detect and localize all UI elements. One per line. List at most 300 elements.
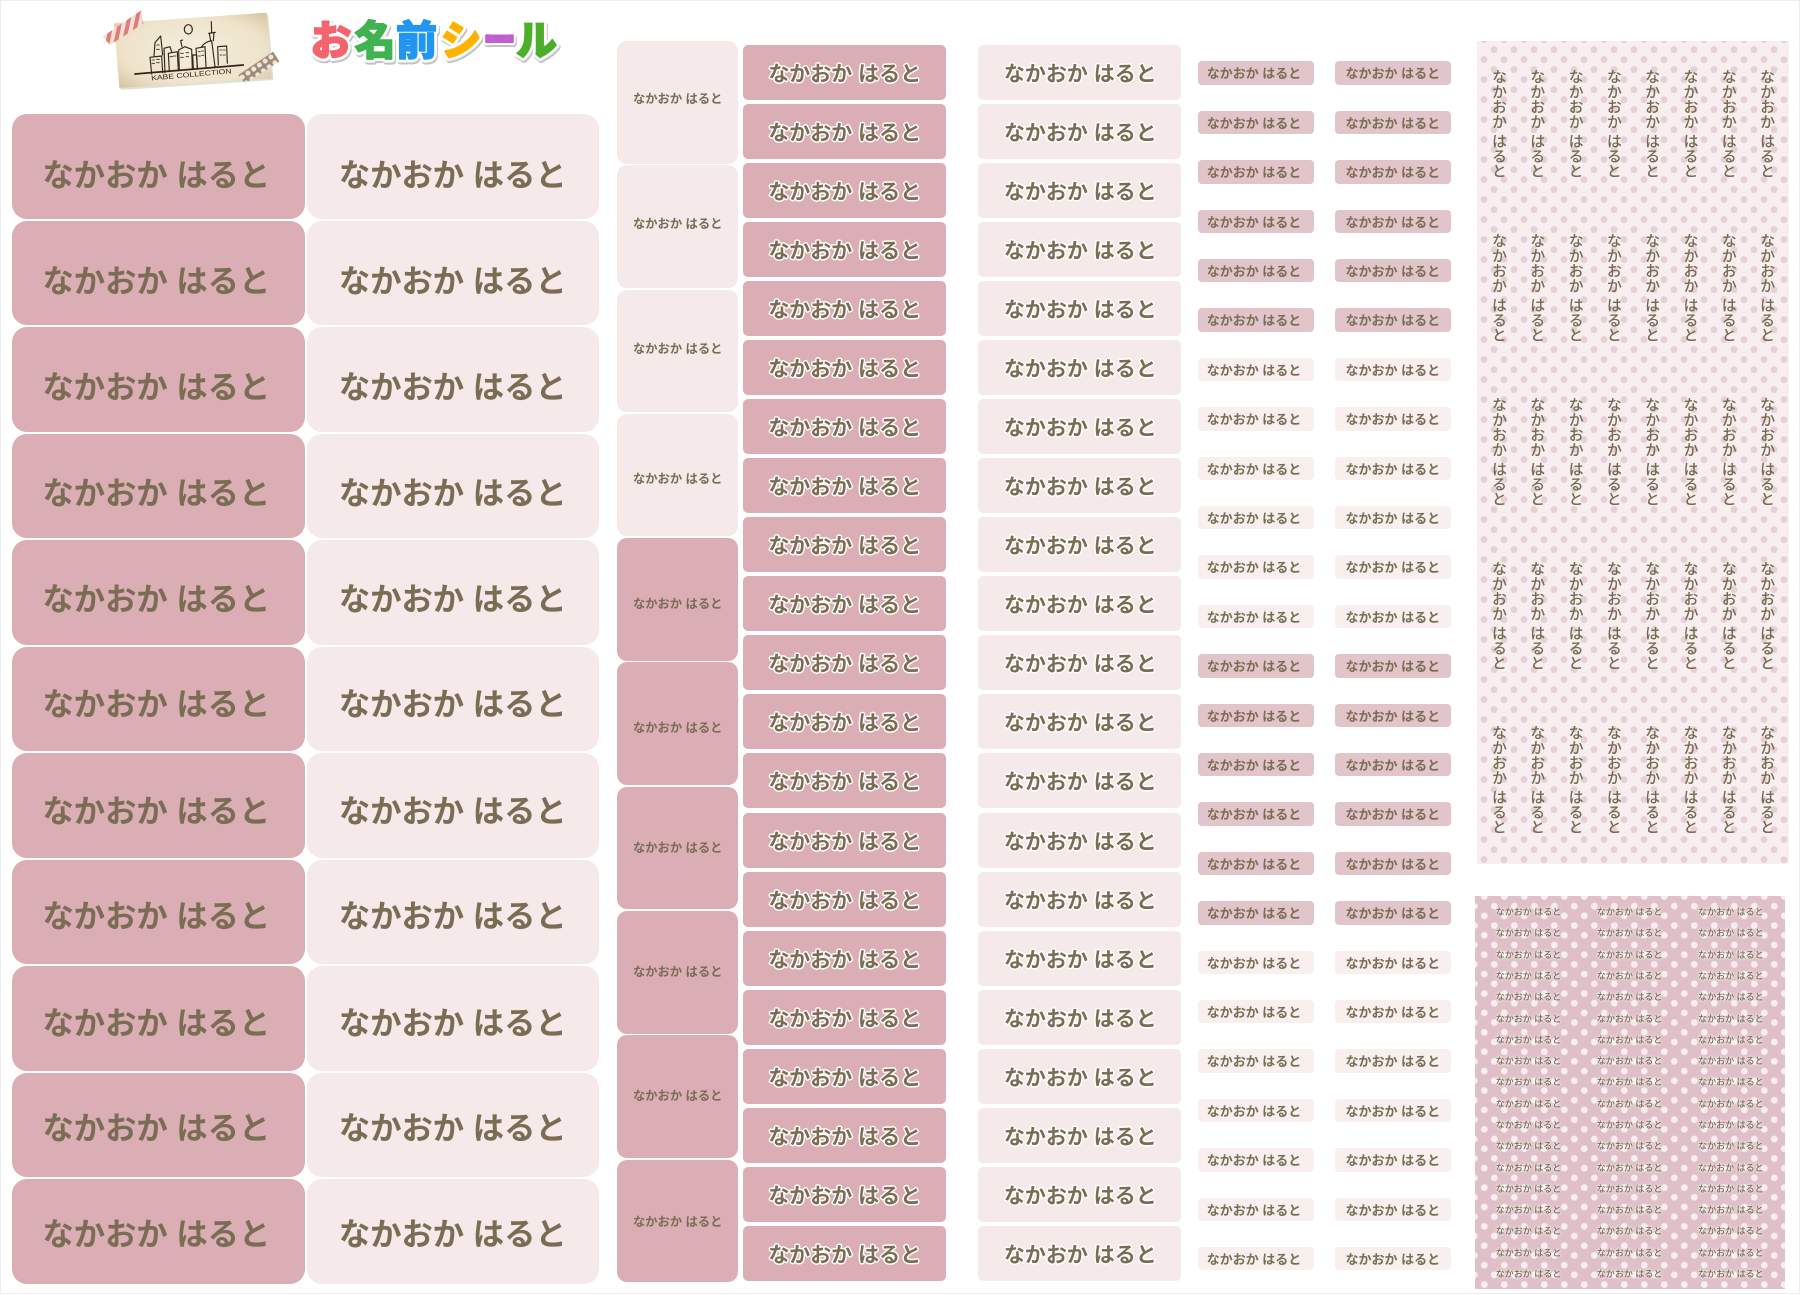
label: なかおか はると: [768, 476, 921, 499]
label: [12, 220, 305, 325]
label: なかおか はると: [768, 653, 921, 676]
name: なかおか はると: [1698, 1141, 1764, 1151]
label: なかおか はると: [42, 158, 270, 192]
name: なかおか はると: [1597, 1269, 1662, 1279]
label: [1335, 160, 1451, 184]
label: [743, 1049, 946, 1104]
label: なかおか はると: [633, 721, 722, 735]
name: なかおか はると: [1758, 233, 1775, 342]
name: なかおか はると: [1496, 1035, 1561, 1045]
label: [978, 635, 1181, 690]
panel: dark polka-dot sheet with tiny names: [1475, 896, 1785, 1289]
label: なかおか はると: [768, 181, 921, 204]
name: なかおか はると: [1720, 233, 1737, 342]
label: なかおか はると: [1207, 857, 1301, 872]
label: [1335, 1198, 1451, 1221]
label: なかおか はると: [1207, 116, 1301, 131]
title shadow: [312, 20, 558, 66]
label: [307, 114, 599, 218]
tiny name grid: [1496, 906, 1764, 1279]
label: [743, 458, 946, 513]
label: [978, 104, 1181, 159]
title halo: [310, 18, 557, 64]
name: なかおか はると: [1698, 1056, 1764, 1066]
label: [978, 576, 1181, 631]
name: なかおか はると: [1643, 561, 1660, 670]
label: なかおか はると: [633, 342, 722, 356]
label: なかおか はると: [768, 1067, 921, 1090]
label: [978, 990, 1181, 1045]
label: なかおか はると: [1207, 66, 1301, 81]
name: なかおか はると: [1698, 1077, 1764, 1087]
name: なかおか はると: [1496, 1184, 1561, 1194]
label: [743, 635, 946, 690]
name: なかおか はると: [1496, 1056, 1561, 1066]
name: なかおか はると: [1567, 69, 1584, 178]
sheet: medium dark labels: [743, 45, 946, 1281]
label: なかおか はると: [1004, 63, 1157, 86]
label: なかおか はると: [1004, 830, 1157, 854]
label: [1198, 555, 1314, 579]
title letters: お: [310, 18, 352, 64]
label: [1335, 654, 1451, 678]
label: なかおか はると: [1346, 1203, 1440, 1218]
label: [1198, 407, 1314, 431]
label: [743, 281, 946, 336]
name: なかおか はると: [1643, 233, 1660, 342]
label: なかおか はると: [1207, 1005, 1301, 1020]
label: [12, 646, 305, 751]
label: [978, 222, 1181, 277]
name: なかおか はると: [1597, 992, 1662, 1002]
label: なかおか はると: [768, 358, 921, 381]
label: なかおか はると: [1207, 1203, 1301, 1218]
label: なかおか はると: [339, 476, 567, 511]
label: [978, 1049, 1181, 1104]
label: [1335, 951, 1451, 974]
label: なかおか はると: [1207, 560, 1301, 575]
label: [978, 1167, 1181, 1222]
label: [743, 990, 946, 1045]
label: [1335, 1099, 1451, 1122]
name: なかおか はると: [1496, 1120, 1561, 1130]
label: なかおか はると: [1004, 890, 1157, 913]
label: [978, 340, 1181, 395]
name: なかおか はると: [1496, 928, 1561, 938]
label: なかおか はると: [1346, 807, 1440, 822]
title letters: シ: [440, 18, 482, 64]
label: なかおか はると: [1346, 610, 1440, 625]
label: [743, 104, 946, 159]
name: なかおか はると: [1496, 1014, 1561, 1024]
label: なかおか はると: [339, 158, 567, 192]
label: なかおか はると: [42, 687, 270, 722]
label: なかおか はると: [633, 597, 722, 611]
label: [1335, 605, 1451, 628]
label: なかおか はると: [1346, 956, 1440, 971]
panel: light polka-dot sheet with vertical names: [1477, 41, 1789, 864]
label: なかおか はると: [1004, 240, 1157, 263]
label: [307, 966, 599, 1070]
label: [978, 281, 1181, 336]
name: なかおか はると: [1698, 992, 1764, 1002]
title letters: ル: [516, 18, 557, 64]
label: なかおか はると: [1346, 857, 1440, 872]
title halo: 名: [354, 18, 396, 64]
label: [1335, 457, 1451, 480]
name: なかおか はると: [1605, 725, 1622, 834]
name: なかおか はると: [1597, 1077, 1662, 1087]
label: [743, 1167, 946, 1222]
label: [12, 1179, 305, 1284]
vertical name grid: [1490, 69, 1775, 834]
label: [743, 1226, 946, 1281]
label: [617, 414, 738, 536]
name: なかおか はると: [1597, 950, 1662, 960]
label: なかおか はると: [1346, 462, 1440, 477]
name: なかおか はると: [1597, 1014, 1662, 1024]
name: なかおか はると: [1681, 725, 1698, 834]
label: なかおか はると: [339, 370, 567, 404]
label: [1335, 1000, 1451, 1023]
title shadow: ル: [517, 20, 558, 66]
label: なかおか はると: [339, 687, 567, 722]
name: なかおか はると: [1528, 233, 1545, 342]
title shadow: お: [312, 20, 352, 66]
label: なかおか はると: [633, 472, 722, 486]
name: なかおか はると: [1597, 907, 1662, 917]
label: [12, 434, 305, 538]
label: [1198, 1198, 1314, 1221]
label: なかおか はると: [339, 1111, 567, 1146]
name: なかおか はると: [1698, 928, 1764, 938]
label: なかおか はると: [768, 63, 921, 86]
label: [307, 327, 599, 432]
label: なかおか はると: [1004, 594, 1157, 617]
name: なかおか はると: [1681, 561, 1698, 670]
label: [1335, 704, 1451, 727]
label: [1198, 61, 1314, 85]
label: なかおか はると: [1004, 1126, 1157, 1149]
label: なかおか はると: [1004, 1244, 1157, 1267]
label: [1198, 160, 1314, 184]
label: [1198, 1099, 1314, 1122]
label: [978, 45, 1181, 100]
label: なかおか はると: [1346, 264, 1440, 279]
label: なかおか はると: [1346, 659, 1440, 674]
city sketch: [135, 22, 243, 74]
label: なかおか はると: [42, 794, 270, 828]
label: [978, 812, 1181, 868]
label: [1198, 308, 1314, 332]
label: [307, 1179, 599, 1284]
logo text: KABE COLLECTION: [151, 68, 232, 82]
label: [307, 540, 599, 644]
name: なかおか はると: [1597, 1163, 1662, 1173]
label: [307, 646, 599, 751]
label: なかおか はると: [339, 1216, 567, 1252]
label: なかおか はると: [1004, 535, 1157, 558]
label: [307, 220, 599, 325]
label: なかおか はると: [1004, 712, 1157, 735]
label: なかおか はると: [1004, 949, 1157, 972]
label: [1198, 654, 1314, 678]
label: なかおか はると: [768, 1244, 921, 1267]
name: なかおか はると: [1597, 1226, 1662, 1236]
label: なかおか はると: [1207, 412, 1301, 427]
label: [1198, 210, 1314, 233]
label: なかおか はると: [42, 476, 270, 511]
label: [743, 222, 946, 277]
name: なかおか はると: [1496, 907, 1561, 917]
label: なかおか はると: [768, 949, 921, 972]
label: なかおか はると: [1004, 1185, 1157, 1208]
label: なかおか はると: [1346, 165, 1440, 180]
name: なかおか はると: [1698, 950, 1764, 960]
name: なかおか はると: [1758, 561, 1775, 670]
label: [1198, 1247, 1314, 1270]
label: なかおか はると: [1207, 659, 1301, 674]
label: なかおか はると: [1004, 181, 1157, 204]
label: なかおか はると: [1207, 462, 1301, 477]
label: [1198, 605, 1314, 628]
label: [617, 787, 738, 909]
label: [1198, 852, 1314, 875]
tape: pink stripes: [103, 10, 143, 45]
label: [978, 694, 1181, 749]
label: なかおか はると: [1207, 1054, 1301, 1069]
name: なかおか はると: [1567, 561, 1584, 670]
label: [1198, 457, 1314, 480]
label: [743, 753, 946, 808]
label: なかおか はると: [1004, 476, 1157, 499]
label: なかおか はると: [768, 890, 921, 913]
label: なかおか はると: [1004, 1067, 1157, 1090]
label: なかおか はると: [1004, 122, 1157, 145]
name: なかおか はると: [1681, 69, 1698, 178]
label: なかおか はると: [1346, 906, 1440, 921]
name: なかおか はると: [1698, 1184, 1764, 1194]
name: なかおか はると: [1528, 69, 1545, 178]
label: なかおか はると: [768, 240, 921, 263]
label: なかおか はると: [339, 582, 567, 616]
name: なかおか はると: [1597, 1056, 1662, 1066]
label: なかおか はると: [1346, 758, 1440, 773]
name: なかおか はると: [1496, 1141, 1561, 1151]
title halo: 前: [396, 18, 437, 64]
label: なかおか はると: [1346, 511, 1440, 526]
title letters: ー: [484, 23, 515, 58]
label: [978, 1108, 1181, 1163]
label: なかおか はると: [1346, 215, 1440, 230]
label: [1198, 901, 1314, 925]
name: なかおか はると: [1605, 233, 1622, 342]
label: なかおか はると: [42, 582, 270, 616]
label: なかおか はると: [1346, 363, 1440, 378]
label: [1335, 1049, 1451, 1073]
label: なかおか はると: [768, 771, 921, 794]
name: なかおか はると: [1528, 561, 1545, 670]
sheet: small labels, column 2: [1335, 61, 1451, 1270]
label: なかおか はると: [1207, 363, 1301, 378]
name: なかおか はると: [1698, 1014, 1764, 1024]
label: [12, 753, 305, 858]
label: [617, 662, 738, 785]
label: なかおか はると: [339, 1006, 567, 1040]
name: なかおか はると: [1597, 1141, 1662, 1151]
label: なかおか はると: [1004, 299, 1157, 322]
name: なかおか はると: [1643, 725, 1660, 834]
label: なかおか はると: [1346, 412, 1440, 427]
name: なかおか はると: [1720, 561, 1737, 670]
title shadow: 前: [397, 20, 438, 66]
paper tag: [114, 13, 273, 90]
label: なかおか はると: [42, 1111, 270, 1146]
label: なかおか はると: [633, 965, 722, 979]
label: なかおか はると: [1346, 1153, 1440, 1168]
label: [1335, 1247, 1451, 1270]
name: なかおか はると: [1490, 69, 1507, 178]
name: なかおか はると: [1597, 971, 1662, 981]
label: [307, 860, 599, 964]
label: なかおか はると: [1004, 1008, 1157, 1031]
label: なかおか はると: [768, 535, 921, 558]
name: なかおか はると: [1496, 1226, 1561, 1236]
label: なかおか はると: [633, 92, 722, 106]
label: [307, 1072, 599, 1177]
name: なかおか はると: [1496, 992, 1561, 1002]
label: なかおか はると: [633, 1215, 722, 1229]
label: なかおか はると: [1346, 66, 1440, 81]
label: なかおか はると: [768, 1008, 921, 1031]
label: [307, 434, 599, 538]
label: なかおか はると: [1207, 956, 1301, 971]
label: [978, 399, 1181, 454]
label: [12, 966, 305, 1070]
name: なかおか はると: [1597, 928, 1662, 938]
label: [1198, 704, 1314, 727]
name: なかおか はると: [1698, 1269, 1764, 1279]
label: [1198, 358, 1314, 381]
name: なかおか はると: [1528, 397, 1545, 506]
name: なかおか はると: [1597, 1205, 1662, 1215]
title halo: ル: [516, 18, 557, 64]
name: なかおか はると: [1698, 907, 1764, 917]
name: なかおか はると: [1643, 69, 1660, 178]
name: なかおか はると: [1605, 397, 1622, 506]
label: なかおか はると: [768, 417, 921, 440]
label: [617, 1035, 738, 1158]
name: なかおか はると: [1720, 69, 1737, 178]
name: なかおか はると: [1490, 725, 1507, 834]
label: [617, 165, 738, 288]
name: なかおか はると: [1758, 397, 1775, 506]
label: [1335, 901, 1451, 925]
label: なかおか はると: [1346, 313, 1440, 328]
label: なかおか はると: [768, 122, 921, 145]
label: [743, 812, 946, 868]
label: [1198, 753, 1314, 776]
title: お名前シール: [310, 18, 561, 66]
name: なかおか はると: [1490, 397, 1507, 506]
name: なかおか はると: [1698, 1226, 1764, 1236]
name: なかおか はると: [1758, 725, 1775, 834]
label: なかおか はると: [42, 1006, 270, 1040]
title letters: 前: [396, 18, 437, 64]
label: なかおか はると: [768, 1126, 921, 1149]
label: [1335, 802, 1451, 826]
label: [978, 931, 1181, 986]
label: なかおか はると: [1207, 709, 1301, 724]
name: なかおか はると: [1567, 233, 1584, 342]
label: [743, 45, 946, 100]
name: なかおか はると: [1496, 1077, 1561, 1087]
label: なかおか はると: [1207, 511, 1301, 526]
label: なかおか はると: [768, 830, 921, 854]
label: [978, 872, 1181, 927]
title letters: 名: [354, 18, 396, 64]
sheet: square labels with small text: [617, 41, 738, 1282]
name: なかおか はると: [1496, 1269, 1561, 1279]
label: なかおか はると: [42, 899, 270, 934]
label: なかおか はると: [339, 264, 567, 299]
label: なかおか はると: [339, 794, 567, 828]
label: なかおか はると: [42, 264, 270, 299]
label: なかおか はると: [1346, 1054, 1440, 1069]
label: [743, 576, 946, 631]
label: なかおか はると: [768, 594, 921, 617]
name: なかおか はると: [1698, 1035, 1764, 1045]
name: なかおか はると: [1720, 725, 1737, 834]
name: なかおか はると: [1605, 561, 1622, 670]
tape: lattice: [238, 52, 279, 83]
label: [1198, 951, 1314, 974]
label: [1335, 555, 1451, 579]
name: なかおか はると: [1496, 1248, 1561, 1258]
label: [1198, 506, 1314, 529]
label: [978, 517, 1181, 572]
label: [1335, 308, 1451, 332]
name: なかおか はると: [1597, 1035, 1662, 1045]
label: なかおか はると: [1207, 215, 1301, 230]
label: [12, 327, 305, 432]
label: なかおか はると: [1207, 807, 1301, 822]
label: なかおか はると: [768, 299, 921, 322]
name: なかおか はると: [1496, 1205, 1561, 1215]
label: [743, 163, 946, 218]
label: [12, 114, 305, 218]
label: なかおか はると: [1346, 1005, 1440, 1020]
label: [617, 911, 738, 1034]
sheet: medium light labels: [978, 45, 1181, 1281]
label: [1198, 111, 1314, 134]
label: [743, 694, 946, 749]
label: なかおか はると: [1207, 906, 1301, 921]
label: なかおか はると: [1207, 610, 1301, 625]
label: [1335, 506, 1451, 529]
name: なかおか はると: [1698, 1120, 1764, 1130]
label: [1335, 1148, 1451, 1172]
logo: Kabe Collection tag: [102, 10, 280, 90]
label: なかおか はると: [1004, 771, 1157, 794]
label: [978, 753, 1181, 808]
label: なかおか はると: [1346, 560, 1440, 575]
label: [617, 290, 738, 412]
name: なかおか はると: [1698, 971, 1764, 981]
label: [1198, 1000, 1314, 1023]
label: なかおか はると: [1207, 264, 1301, 279]
label: なかおか はると: [1207, 758, 1301, 773]
